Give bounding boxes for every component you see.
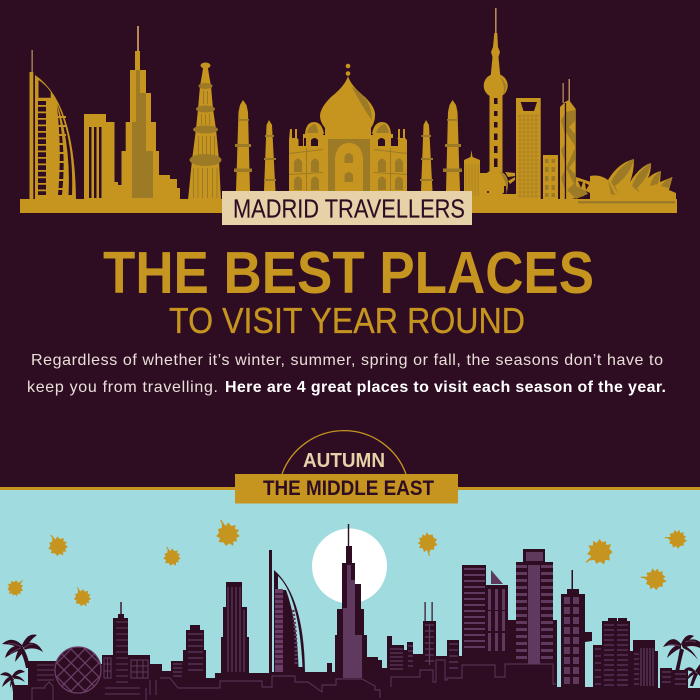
Burj Khalifa purple faces <box>343 565 362 678</box>
building: spired block <box>464 150 480 199</box>
right towers windows <box>595 625 686 686</box>
tall ribbed tower <box>464 569 485 647</box>
autumn arc <box>282 431 406 474</box>
central purple tower <box>516 552 553 664</box>
intro text: keep you from travelling. <box>27 379 218 396</box>
Burj Al Arab silhouette <box>274 570 305 672</box>
left block windows <box>37 622 148 682</box>
title: THE BEST PLACES <box>103 240 594 306</box>
sphere <box>54 646 102 694</box>
palm trees <box>0 634 700 692</box>
landmark: Qutb Minar <box>188 62 222 200</box>
building: slotted tower <box>84 114 122 200</box>
banner: The Middle East <box>235 474 458 504</box>
subtitle: TO VISIT YEAR ROUND <box>169 300 525 341</box>
ground mass <box>13 524 700 700</box>
banner: The Middle East: THE MIDDLE EAST <box>263 477 434 500</box>
landmark: Burj Khalifa <box>122 26 180 199</box>
small purple windows middle <box>390 625 458 669</box>
landmark: right minarets <box>420 100 462 191</box>
season label: AUTUMN <box>303 450 385 472</box>
top skyline <box>20 8 677 213</box>
landmark: left minarets <box>234 100 276 191</box>
bottom skyline <box>0 524 700 700</box>
landmark: Sydney Opera House <box>578 159 676 204</box>
falling leaves <box>6 520 690 608</box>
intro text <box>27 352 666 396</box>
intro text: Here are 4 great places to visit each season of the year. <box>225 379 666 396</box>
moon <box>312 528 387 604</box>
building: small grid block <box>543 155 558 199</box>
landmark: World Financial Center <box>516 98 541 200</box>
landmark: Bank of China tower <box>560 79 591 199</box>
angled tower <box>488 570 505 651</box>
landmark: Burj Al Arab <box>30 50 76 200</box>
landmark: Taj Mahal <box>289 64 407 191</box>
sky panel <box>0 490 700 700</box>
contour lines <box>32 660 556 700</box>
building windows <box>173 587 244 676</box>
banner: Madrid Travellers: MADRID TRAVELLERS <box>233 194 465 224</box>
landmark: Oriental Pearl Tower <box>480 8 518 200</box>
window grid tower <box>564 597 579 684</box>
intro text: Regardless of whether it’s winter, summer, spring or fall, the seasons don’t have to <box>31 352 663 369</box>
